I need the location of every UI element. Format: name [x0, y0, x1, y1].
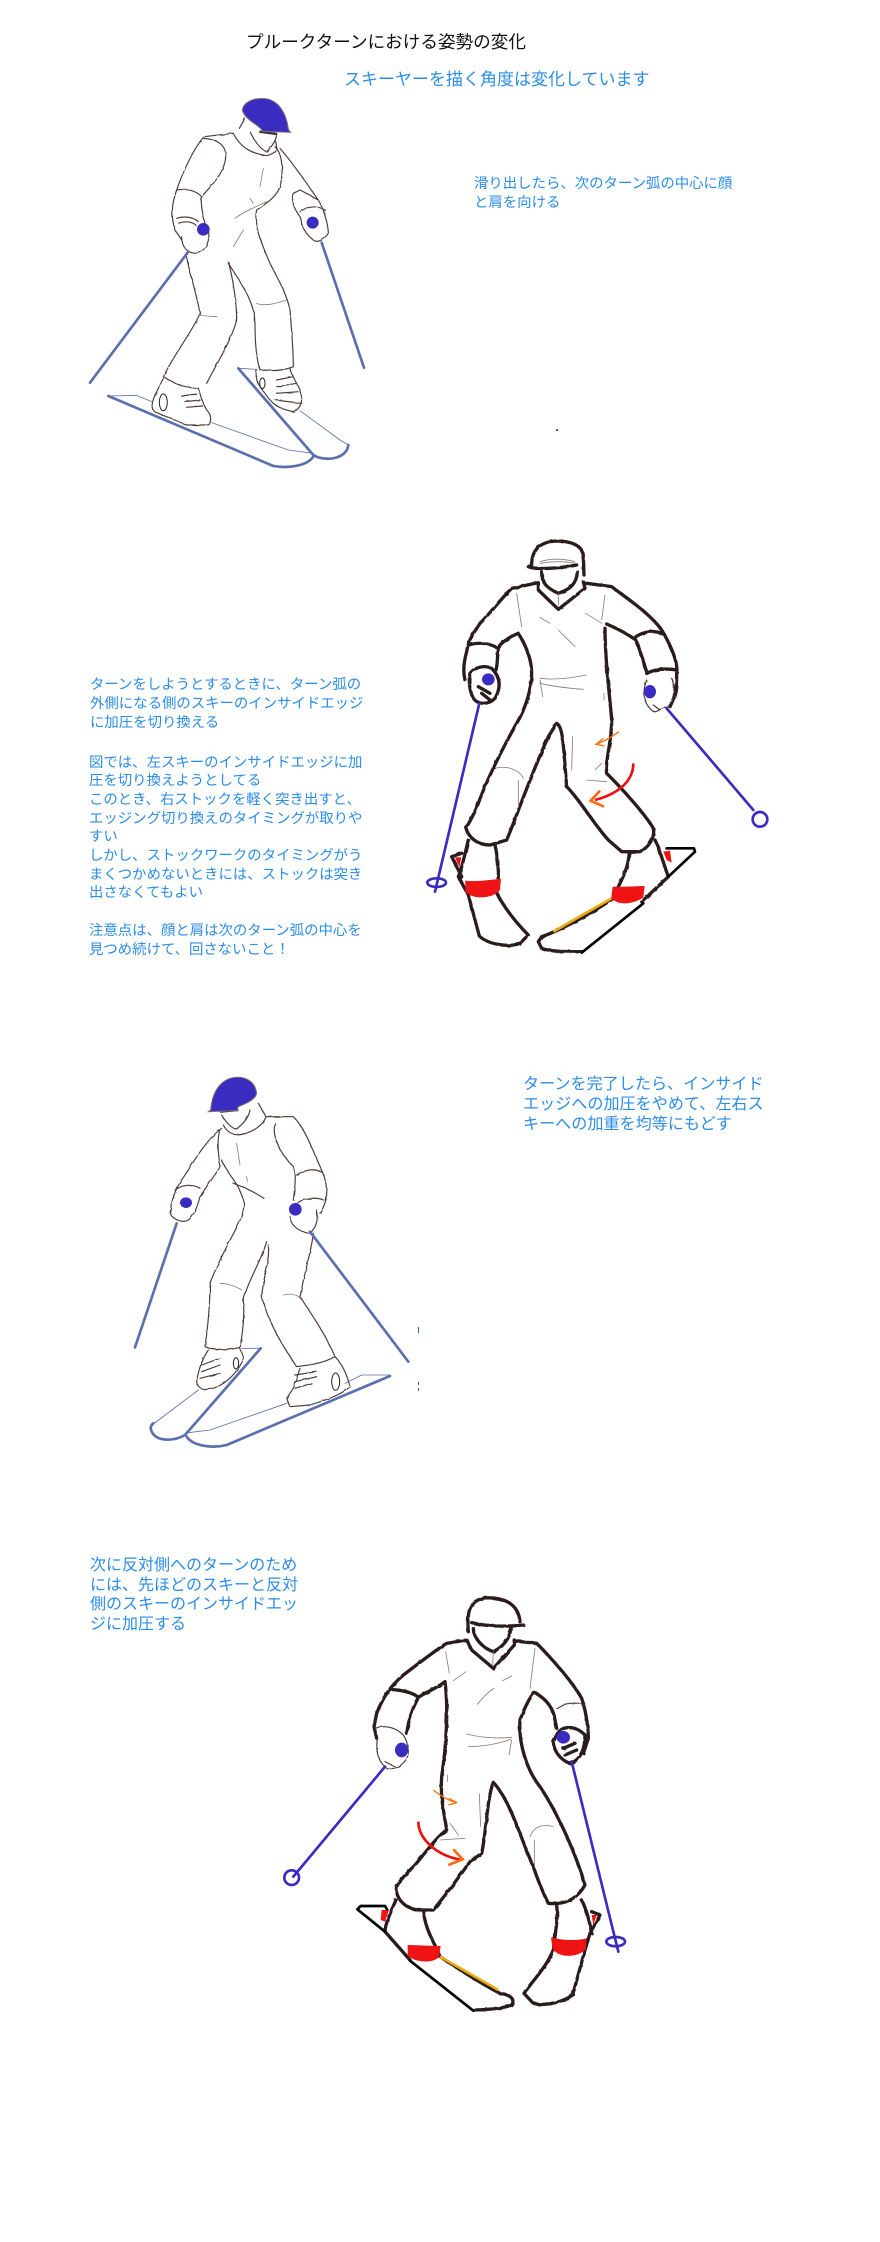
- stray mark: [556, 429, 558, 431]
- text block: step 4: ジに加圧する: [90, 1615, 186, 1633]
- title: プルークターンにおける姿勢の変化: [246, 32, 526, 52]
- subtitle note: スキーヤーを描く角度は変化しています: [344, 70, 650, 89]
- figure: skier 3 side view: [135, 1077, 408, 1447]
- text block: step 4: [90, 1556, 298, 1633]
- text block: step 2: エッジング切り換えのタイミングが取りや: [89, 810, 362, 827]
- text block: step 2: 見つめ続けて、回さないこと！: [89, 941, 290, 958]
- figure: skier 2 front view: [427, 541, 767, 953]
- text block: step 4: には、先ほどのスキーと反対: [90, 1576, 298, 1594]
- text block: step 3: キーへの加重を均等にもどす: [523, 1115, 732, 1133]
- text block: step 3: [523, 1075, 764, 1133]
- text block: step 3: ターンを完了したら、インサイド: [523, 1075, 764, 1093]
- text block: step 1: と肩を向ける: [474, 194, 560, 211]
- text block: step 2: [89, 676, 363, 958]
- stray marks: [418, 1327, 420, 1391]
- text block: step 2: しかし、ストックワークのタイミングがう: [89, 847, 362, 864]
- text block: step 2: 出さなくてもよい: [89, 884, 203, 901]
- text block: step 1: [474, 175, 733, 211]
- text block: step 2: 注意点は、顔と肩は次のターン弧の中心を: [89, 922, 362, 939]
- text block: step 1: 滑り出したら、次のターン弧の中心に顔: [474, 175, 733, 192]
- text block: step 2: まくつかめないときには、ストックは突き: [89, 866, 362, 883]
- figure: skier 1 side view: [90, 98, 364, 467]
- text block: step 4: 側のスキーのインサイドエッ: [90, 1595, 298, 1613]
- text block: step 2: 圧を切り換えようとしてる: [89, 772, 261, 789]
- text block: step 2: ターンをしようとするときに、ターン弧の: [90, 676, 361, 693]
- text block: step 2: このとき、右ストックを軽く突き出すと、: [89, 791, 361, 808]
- text block: step 2: に加圧を切り換える: [90, 714, 219, 731]
- text block: step 2: 外側になる側のスキーのインサイドエッジ: [90, 695, 363, 712]
- text block: step 4: 次に反対側へのターンのため: [90, 1556, 297, 1574]
- text block: step 2: 図では、左スキーのインサイドエッジに加: [89, 754, 362, 771]
- figure: skier 4 front view: [284, 1598, 625, 2011]
- text block: step 2: すい: [89, 828, 118, 845]
- text block: step 3: エッジへの加圧をやめて、左右ス: [523, 1095, 764, 1113]
